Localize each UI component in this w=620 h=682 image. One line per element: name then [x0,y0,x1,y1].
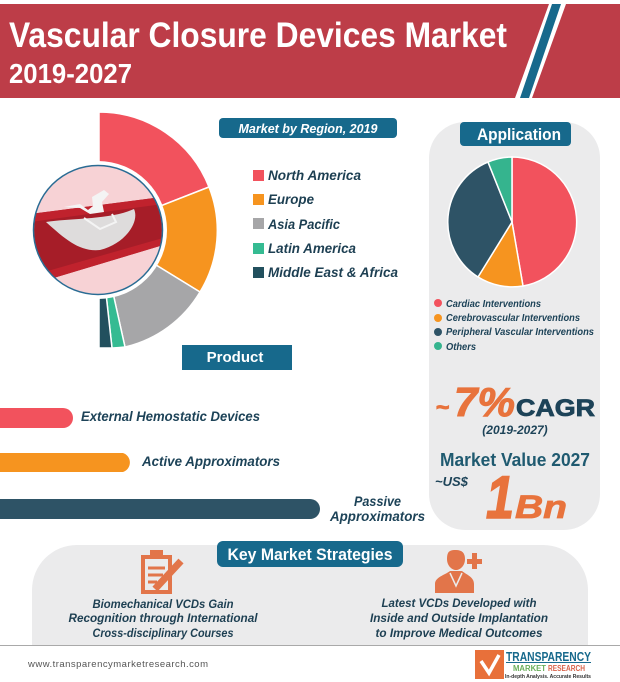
text: strategy one: Biomechanical VCDs Gain [92,597,234,611]
logo: TRANSPARENCY [506,649,591,664]
stat: CAGR [436,379,595,437]
legend: application: Others [446,342,476,353]
legend: regions: Middle East & Africa [268,264,398,280]
legend: regions: Europe [268,191,314,207]
legend: regions: Asia Pacific [267,216,340,232]
heading: market by region: Market by Region, 2019 [239,122,378,136]
text: strategy one: Cross-disciplinary Courses [92,626,234,640]
legend: application [434,299,594,353]
header banner [0,4,620,98]
bar: passive approximators: Passive [354,493,401,509]
heading: application: Application [477,125,561,144]
footer line [0,645,620,646]
bar: external hemostatic devices [0,408,260,428]
website url: www.transparencymarketresearch.com [27,659,208,670]
logo: MARKET [513,664,546,673]
icon: doctor with plus [435,550,482,593]
heading: product [182,345,292,370]
stat: market value [435,450,590,531]
heading: key market strategies: Key Market Strategies [228,545,392,564]
legend: application: Cardiac Interventions [446,299,541,310]
text: strategy two: Latest VCDs Developed with [382,596,536,610]
heading: market by region [219,118,397,138]
legend: regions: North America [268,167,361,183]
title: Vascular Closure Devices Market [9,16,507,55]
logo [475,649,591,680]
panel: application [429,122,600,531]
bar: active approximators: Active Approximators [141,453,280,469]
stat: market value: ~US$ [435,474,469,489]
icon: vessel closure device illustration [29,160,170,300]
heading: application [460,122,571,146]
text: strategy one: Recognition through International [68,611,258,625]
legend: regions [253,167,398,280]
icon: clipboard [143,550,181,592]
stat: CAGR: ~ [436,394,449,420]
pie chart: application [448,157,577,287]
stat: market value: 1 [486,464,514,531]
panel: key market strategies [32,541,588,645]
text: strategy two: Inside and Outside Implantation [370,611,548,625]
legend: application: Peripheral Vascular Interventions [446,327,594,338]
text: strategy one [68,597,258,640]
stat: CAGR: (2019-2027) [482,423,548,437]
donut chart: market by region [99,112,217,348]
subtitle years: 2019-2027 [9,58,132,89]
heading: product: Product [207,349,263,366]
text: strategy two [370,596,548,640]
bar: active approximators [0,453,280,472]
bar: passive approximators: Approximators [329,508,425,524]
stat: market value: Bn [515,489,567,525]
logo: In-depth Analysis. Accurate Results [505,674,591,680]
legend: regions: Latin America [268,240,356,256]
logo: RESEARCH [548,664,585,673]
bar: passive approximators [0,493,425,524]
stat: market value: Market Value 2027 [440,450,590,470]
stat: CAGR: 7% [454,379,515,425]
legend: application: Cerebrovascular Interventions [446,313,580,324]
bar: external hemostatic devices: External Hemostatic Devices [81,408,260,424]
heading: key market strategies [217,541,403,567]
text: strategy two: to Improve Medical Outcomes [376,626,543,640]
stat: CAGR: CAGR [516,395,595,422]
